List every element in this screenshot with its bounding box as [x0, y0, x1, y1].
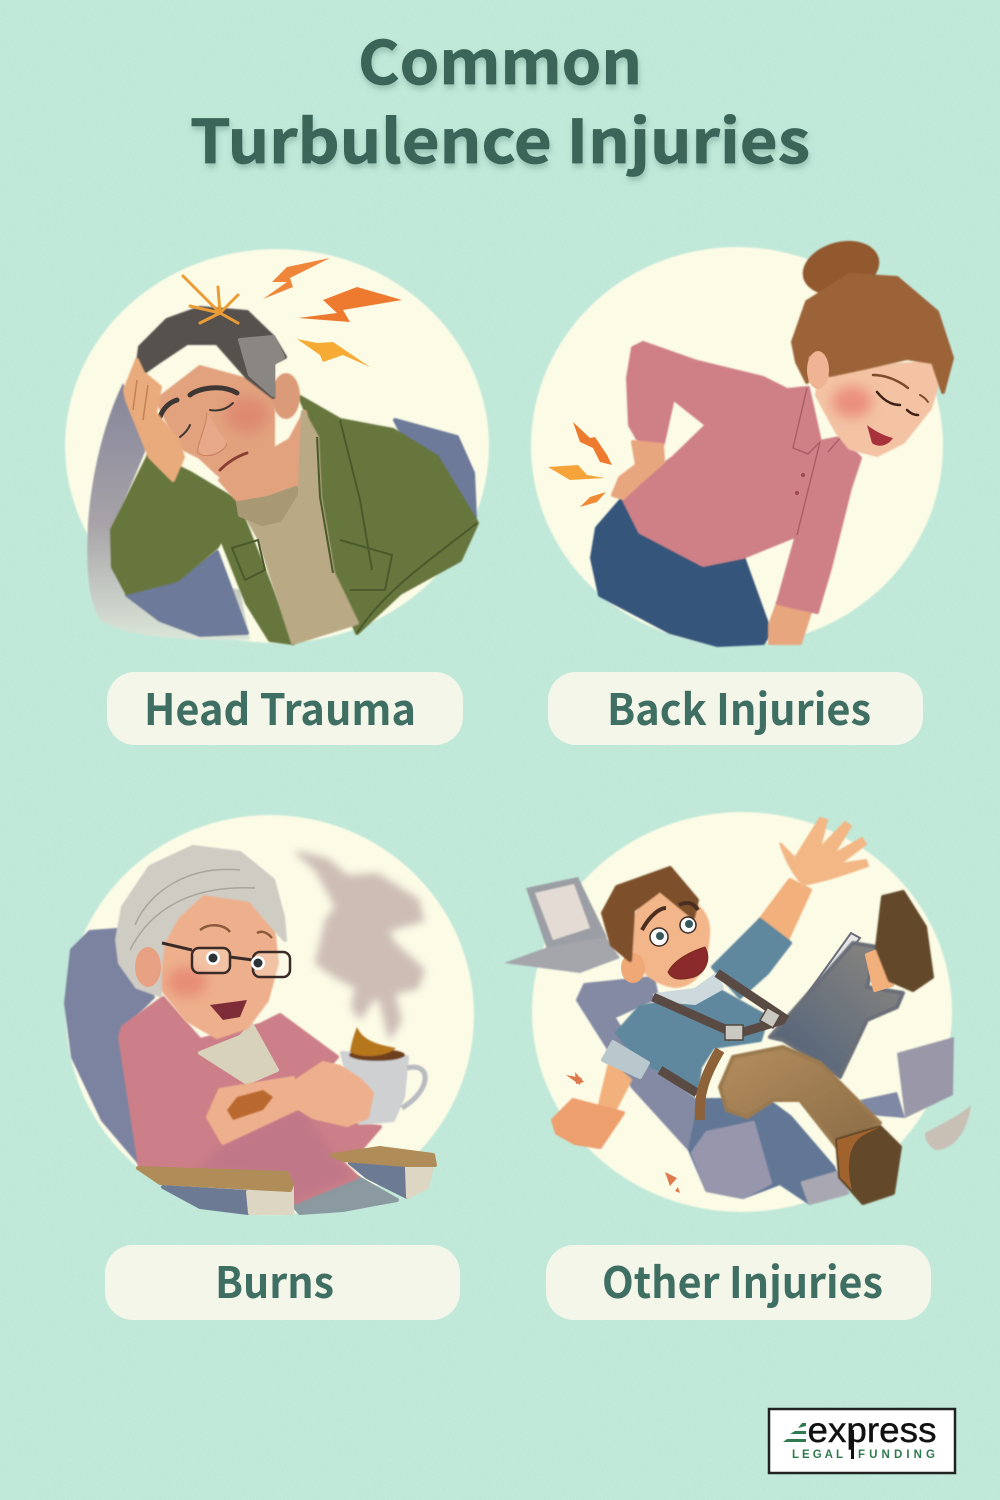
- shirt collar: [655, 975, 722, 1003]
- label: head trauma: Head Trauma: [144, 676, 416, 738]
- seat: [66, 930, 153, 1167]
- glasses: [162, 943, 290, 977]
- hair: [603, 868, 697, 960]
- blush: [832, 386, 872, 418]
- burn mark: [227, 1090, 273, 1120]
- tray table: [790, 933, 860, 1022]
- panel: other injuries: [504, 812, 971, 1212]
- man with jacket: [112, 397, 477, 643]
- buckles: [725, 1007, 780, 1040]
- title: Turbulence Injuries: [190, 94, 810, 181]
- mouth: [210, 1000, 247, 1020]
- pain bolts: [548, 422, 612, 507]
- shirt sleeve raised: [713, 920, 790, 997]
- pupils: [656, 920, 693, 940]
- hair strands: [130, 869, 255, 950]
- laptop: [504, 877, 620, 973]
- logo: Express Legal Funding: LEGAL: [792, 1449, 843, 1461]
- airplane seat: [87, 383, 475, 640]
- sweater: [623, 343, 860, 612]
- steam: [298, 853, 423, 1037]
- label: back injuries: Back Injuries: [607, 676, 871, 738]
- face: [157, 367, 273, 497]
- ear: [272, 373, 300, 419]
- panel: head trauma: [65, 249, 489, 643]
- tan trouser leg: [720, 1047, 880, 1147]
- head: [630, 892, 710, 988]
- lower shoe: [837, 1127, 900, 1203]
- hair: [138, 308, 285, 397]
- label: burns: [105, 1245, 460, 1320]
- ear: [621, 953, 645, 983]
- ankle: [867, 950, 892, 990]
- cream circle: [66, 815, 474, 1215]
- label: other injuries: [546, 1245, 931, 1320]
- cream circle: [532, 812, 952, 1212]
- nose: [198, 413, 227, 456]
- label: other injuries: Other Injuries: [602, 1249, 883, 1311]
- jeans: [592, 498, 770, 645]
- sweater: [120, 998, 380, 1203]
- lower hand: [770, 603, 810, 643]
- hand on back: [613, 442, 663, 498]
- eyebrows: [642, 903, 698, 930]
- grey temple hair: [240, 337, 283, 395]
- hand on mug: [293, 1063, 372, 1125]
- grey trouser leg: [770, 943, 903, 1077]
- cream circle: [531, 247, 943, 645]
- mouth: [867, 425, 893, 446]
- panel: burns: [66, 815, 474, 1215]
- logo: Express Legal Funding: FUNDING: [858, 1449, 935, 1461]
- mug: [342, 1027, 425, 1123]
- harness straps: [653, 973, 787, 1120]
- label: burns: Burns: [215, 1249, 334, 1311]
- blouse: [200, 1025, 277, 1083]
- face: [817, 362, 940, 455]
- ear: [806, 348, 830, 388]
- red sparks: [566, 1072, 680, 1193]
- title: [190, 15, 810, 181]
- torso: [617, 987, 767, 1090]
- hair: [117, 847, 285, 995]
- logo: Express Legal Funding: express: [808, 1411, 936, 1450]
- finger lines: [133, 380, 148, 420]
- buttons: [795, 473, 805, 495]
- burned arm: [208, 1078, 300, 1143]
- left hand: [553, 1100, 623, 1147]
- logo: Express Legal Funding: [769, 1409, 955, 1473]
- eyes: [206, 951, 265, 970]
- blush: [225, 397, 269, 433]
- logo stripes: [783, 1423, 806, 1442]
- hand on head: [125, 360, 183, 480]
- left arm: [597, 1063, 630, 1117]
- shoe upper trim: [837, 1127, 880, 1190]
- ear: [135, 947, 161, 987]
- shirt: [240, 412, 357, 643]
- sweater details: [793, 388, 840, 535]
- panel: back injuries: [531, 233, 952, 645]
- mouth: [668, 947, 708, 979]
- cream circle: [65, 249, 489, 643]
- broken seat part: [860, 1037, 971, 1150]
- label: head trauma: [107, 672, 463, 745]
- neck: [220, 412, 312, 503]
- title: Common: [358, 15, 642, 102]
- closed eyes and smile: [873, 375, 928, 415]
- eyebrows and eyes: [160, 388, 247, 470]
- raised arm: [760, 880, 810, 940]
- blush: [167, 967, 207, 997]
- ear over hair: [807, 351, 829, 389]
- armrests: [138, 1148, 435, 1213]
- lightning bolts and impact star: [183, 258, 402, 367]
- sweater lower shading: [200, 1110, 350, 1200]
- face: [160, 893, 277, 1037]
- shirt collar: [238, 488, 296, 524]
- hair and bun: [793, 233, 952, 392]
- upper shoe: [877, 892, 932, 990]
- trousers: [293, 1177, 397, 1213]
- eyebrows: [200, 925, 272, 938]
- raised hand: [780, 818, 868, 885]
- seat: [578, 978, 847, 1203]
- logo stem: [851, 1430, 854, 1459]
- label: back injuries: [548, 672, 923, 745]
- sleeve cuff: [603, 1042, 648, 1077]
- jacket seam and pockets: [232, 420, 477, 633]
- eyes: [650, 917, 696, 946]
